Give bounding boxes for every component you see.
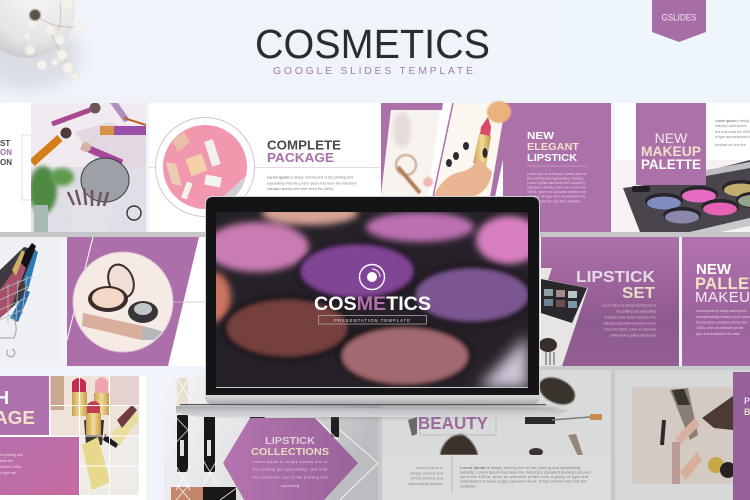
body text: right: centuries — [460, 484, 476, 488]
body text: and not only five centuries. — [540, 200, 581, 204]
panel: lipstick collections slide — [164, 376, 378, 500]
body text: type and scrambled it to make — [696, 332, 740, 336]
photo: gold lipsticks — [50, 376, 139, 495]
heading: lipstick collections — [251, 435, 329, 458]
body text: the printing and typesetting — [616, 310, 656, 314]
photo: brushes and mascara — [408, 372, 602, 456]
body text: Lorem Ipsum is simply dummy text of the printing and — [267, 176, 353, 180]
heading: partial title: P — [744, 396, 750, 406]
body text: left: simply dummy text — [410, 470, 444, 476]
heading: lipstick collections: LIPSTICK — [265, 435, 315, 447]
body text — [602, 304, 657, 338]
heading: cosmetics: COSMETICS — [314, 294, 431, 315]
photo: palette and brush — [539, 268, 588, 366]
heading: beauty: BEAUTY — [418, 413, 488, 433]
body text: five centuries, text of the printing and — [252, 476, 328, 480]
panel: new pallete makeup slide — [682, 237, 750, 366]
body text: left: of the printing and — [411, 476, 443, 480]
heading: new elegant lipstick: LIPSTICK — [527, 152, 577, 164]
photo: hand holding lipstick — [434, 101, 511, 197]
heading: new elegant lipstick — [527, 130, 580, 164]
title: COSMETICS — [255, 21, 490, 67]
heading: complete package — [267, 138, 341, 165]
heading: partial slide title: ON — [0, 158, 12, 167]
body text: industry's standard dummy text ever — [603, 322, 657, 326]
heading: partial title — [744, 396, 750, 417]
heading: partial slide title — [0, 139, 12, 167]
heading: partial title — [0, 388, 35, 428]
heading: complete package: COMPLETE — [267, 138, 341, 152]
heading: partial slide title: ON — [0, 148, 12, 157]
diamond text panel — [223, 418, 358, 500]
row gap shading — [500, 366, 750, 376]
body text: 1500s, when an unknown printer — [696, 326, 745, 330]
body text — [252, 460, 328, 488]
body text: typesetting — [281, 484, 299, 488]
photo: scattered makeup — [632, 387, 736, 484]
body text: right: scrambled it to make a type specimen book. It has survived not only five — [460, 480, 587, 484]
text strip — [382, 455, 611, 500]
body text: a galley of type and scrambled it to — [527, 194, 585, 198]
body text: right: Lorem Ipsum is simply dummy text of the printing and typesetting — [460, 466, 580, 470]
panel: brushes slide — [0, 102, 146, 232]
panel: lipstick package slide — [0, 376, 146, 500]
purple label block — [0, 376, 49, 435]
body text: since the 1500s, when an unknown — [604, 328, 656, 332]
body text: the printing and typesetting. Just only — [253, 468, 327, 472]
panel: beauty slide — [378, 370, 612, 500]
laptop lid — [205, 196, 540, 404]
icon: cosmetics logo — [360, 264, 384, 290]
screen: eyeshadow palette close-up — [216, 212, 528, 388]
heading: new pallete makeup: NEW — [696, 261, 732, 278]
laptop — [176, 196, 568, 418]
panel: shopping cart slide — [0, 243, 38, 358]
heading: lipstick collections: COLLECTIONS — [251, 446, 329, 458]
body text: left — [409, 465, 444, 486]
heading: partial slide title: ST — [0, 139, 10, 148]
icon: lip gloss tubes — [171, 378, 339, 500]
body text — [696, 309, 750, 336]
circular photo: compact and foundation — [73, 252, 173, 352]
body text — [715, 119, 750, 147]
body text: of type and — [0, 471, 16, 475]
body text: left: Lorem Ipsum is — [416, 465, 443, 470]
body text: left: typesetting industry — [409, 481, 443, 486]
circular photo: pink products — [156, 118, 254, 216]
body text: industry.Lorem Ipsum — [715, 124, 747, 128]
body text: Lorem Ipsum is simply — [715, 119, 750, 123]
icon: cart full of makeup — [0, 243, 38, 357]
brushes photo — [29, 102, 146, 232]
heading: complete package: PACKAGE — [267, 150, 334, 165]
body text: right: industry. Lorem Ipsum has been the industry's standard dummy text ever — [460, 470, 592, 474]
subtitle: GOOGLE SLIDES TEMPLATE — [273, 65, 473, 77]
body text: industry.Lorem Ipsum has been the — [605, 316, 656, 320]
body text — [527, 172, 586, 204]
body text: and the 1500s, — [0, 465, 22, 469]
body text — [0, 453, 23, 475]
lower text block — [0, 437, 79, 495]
heading: new makeup palette: MAKEUP — [641, 143, 701, 159]
vase with white flowers — [0, 0, 84, 90]
body text: Lorem Ipsum is simply dummy text of — [527, 172, 586, 176]
body text: the printing and — [0, 453, 23, 457]
body text: been the — [0, 459, 13, 463]
panel: new makeup palette slide — [615, 103, 750, 232]
heading: new pallete makeup — [695, 261, 750, 306]
heading: lipstick set — [576, 269, 656, 302]
body text: standard dummy text ever since the — [527, 186, 586, 190]
heading: new elegant lipstick: NEW — [527, 130, 554, 142]
body text — [267, 176, 357, 191]
body text: Lorem Ipsum is simply dummy text of — [252, 460, 328, 464]
subtitle box — [318, 316, 426, 324]
heading: new makeup palette — [641, 130, 701, 172]
body text: of type and scrambled it — [715, 135, 750, 139]
heading: lipstick set: SET — [622, 285, 656, 302]
heading: lipstick set: LIPSTICK — [576, 269, 656, 286]
panel: compact powder slide — [67, 237, 205, 366]
panel: complete package slide — [149, 103, 381, 232]
heading: new makeup palette: PALETTE — [641, 156, 701, 172]
body text: printer took a galley of type and — [610, 334, 656, 338]
body text: 1500s, when an unknown printer took — [527, 190, 586, 194]
panel: new elegant lipstick slide — [381, 101, 611, 232]
photo: powder and brush — [381, 110, 440, 196]
body text: Lorem Ipsum is simply dummy text of — [602, 304, 656, 308]
body text: Lorem Ipsum has been the industry's — [527, 181, 585, 185]
body text: the printing and typesetting industry. — [527, 176, 584, 180]
body text: the industry's standard dummy text — [696, 320, 747, 324]
laptop base — [176, 404, 568, 417]
panel: lipstick set slide — [539, 237, 679, 366]
row separators — [0, 232, 750, 237]
heading: new makeup palette: NEW — [655, 130, 688, 146]
body text: standard dummy text ever since the 1500s. — [267, 187, 334, 191]
body text: typesetting industry.Lorem Ipsum has been the industry's — [267, 182, 357, 186]
badge: GSLIDES: GSLIDES — [662, 12, 696, 22]
panel: flat lay slide — [611, 370, 750, 500]
body text: right: since the 1500s, when an unknown printer took a galley of type and — [460, 475, 588, 479]
purple side panel — [733, 372, 750, 500]
subtitle box: PRESENTATION TEMPLATE — [334, 318, 410, 323]
heading: new elegant lipstick: ELEGANT — [527, 141, 580, 153]
badge: GSLIDES — [652, 0, 706, 42]
body text: right — [460, 466, 592, 488]
body text: and typesetting industry.Lorem Ipsum — [696, 315, 750, 319]
photo: eyeshadow palette — [623, 160, 750, 232]
body text: Lorem Ipsum is simply dummy text — [696, 309, 747, 313]
body text: survived not only five — [715, 143, 746, 147]
